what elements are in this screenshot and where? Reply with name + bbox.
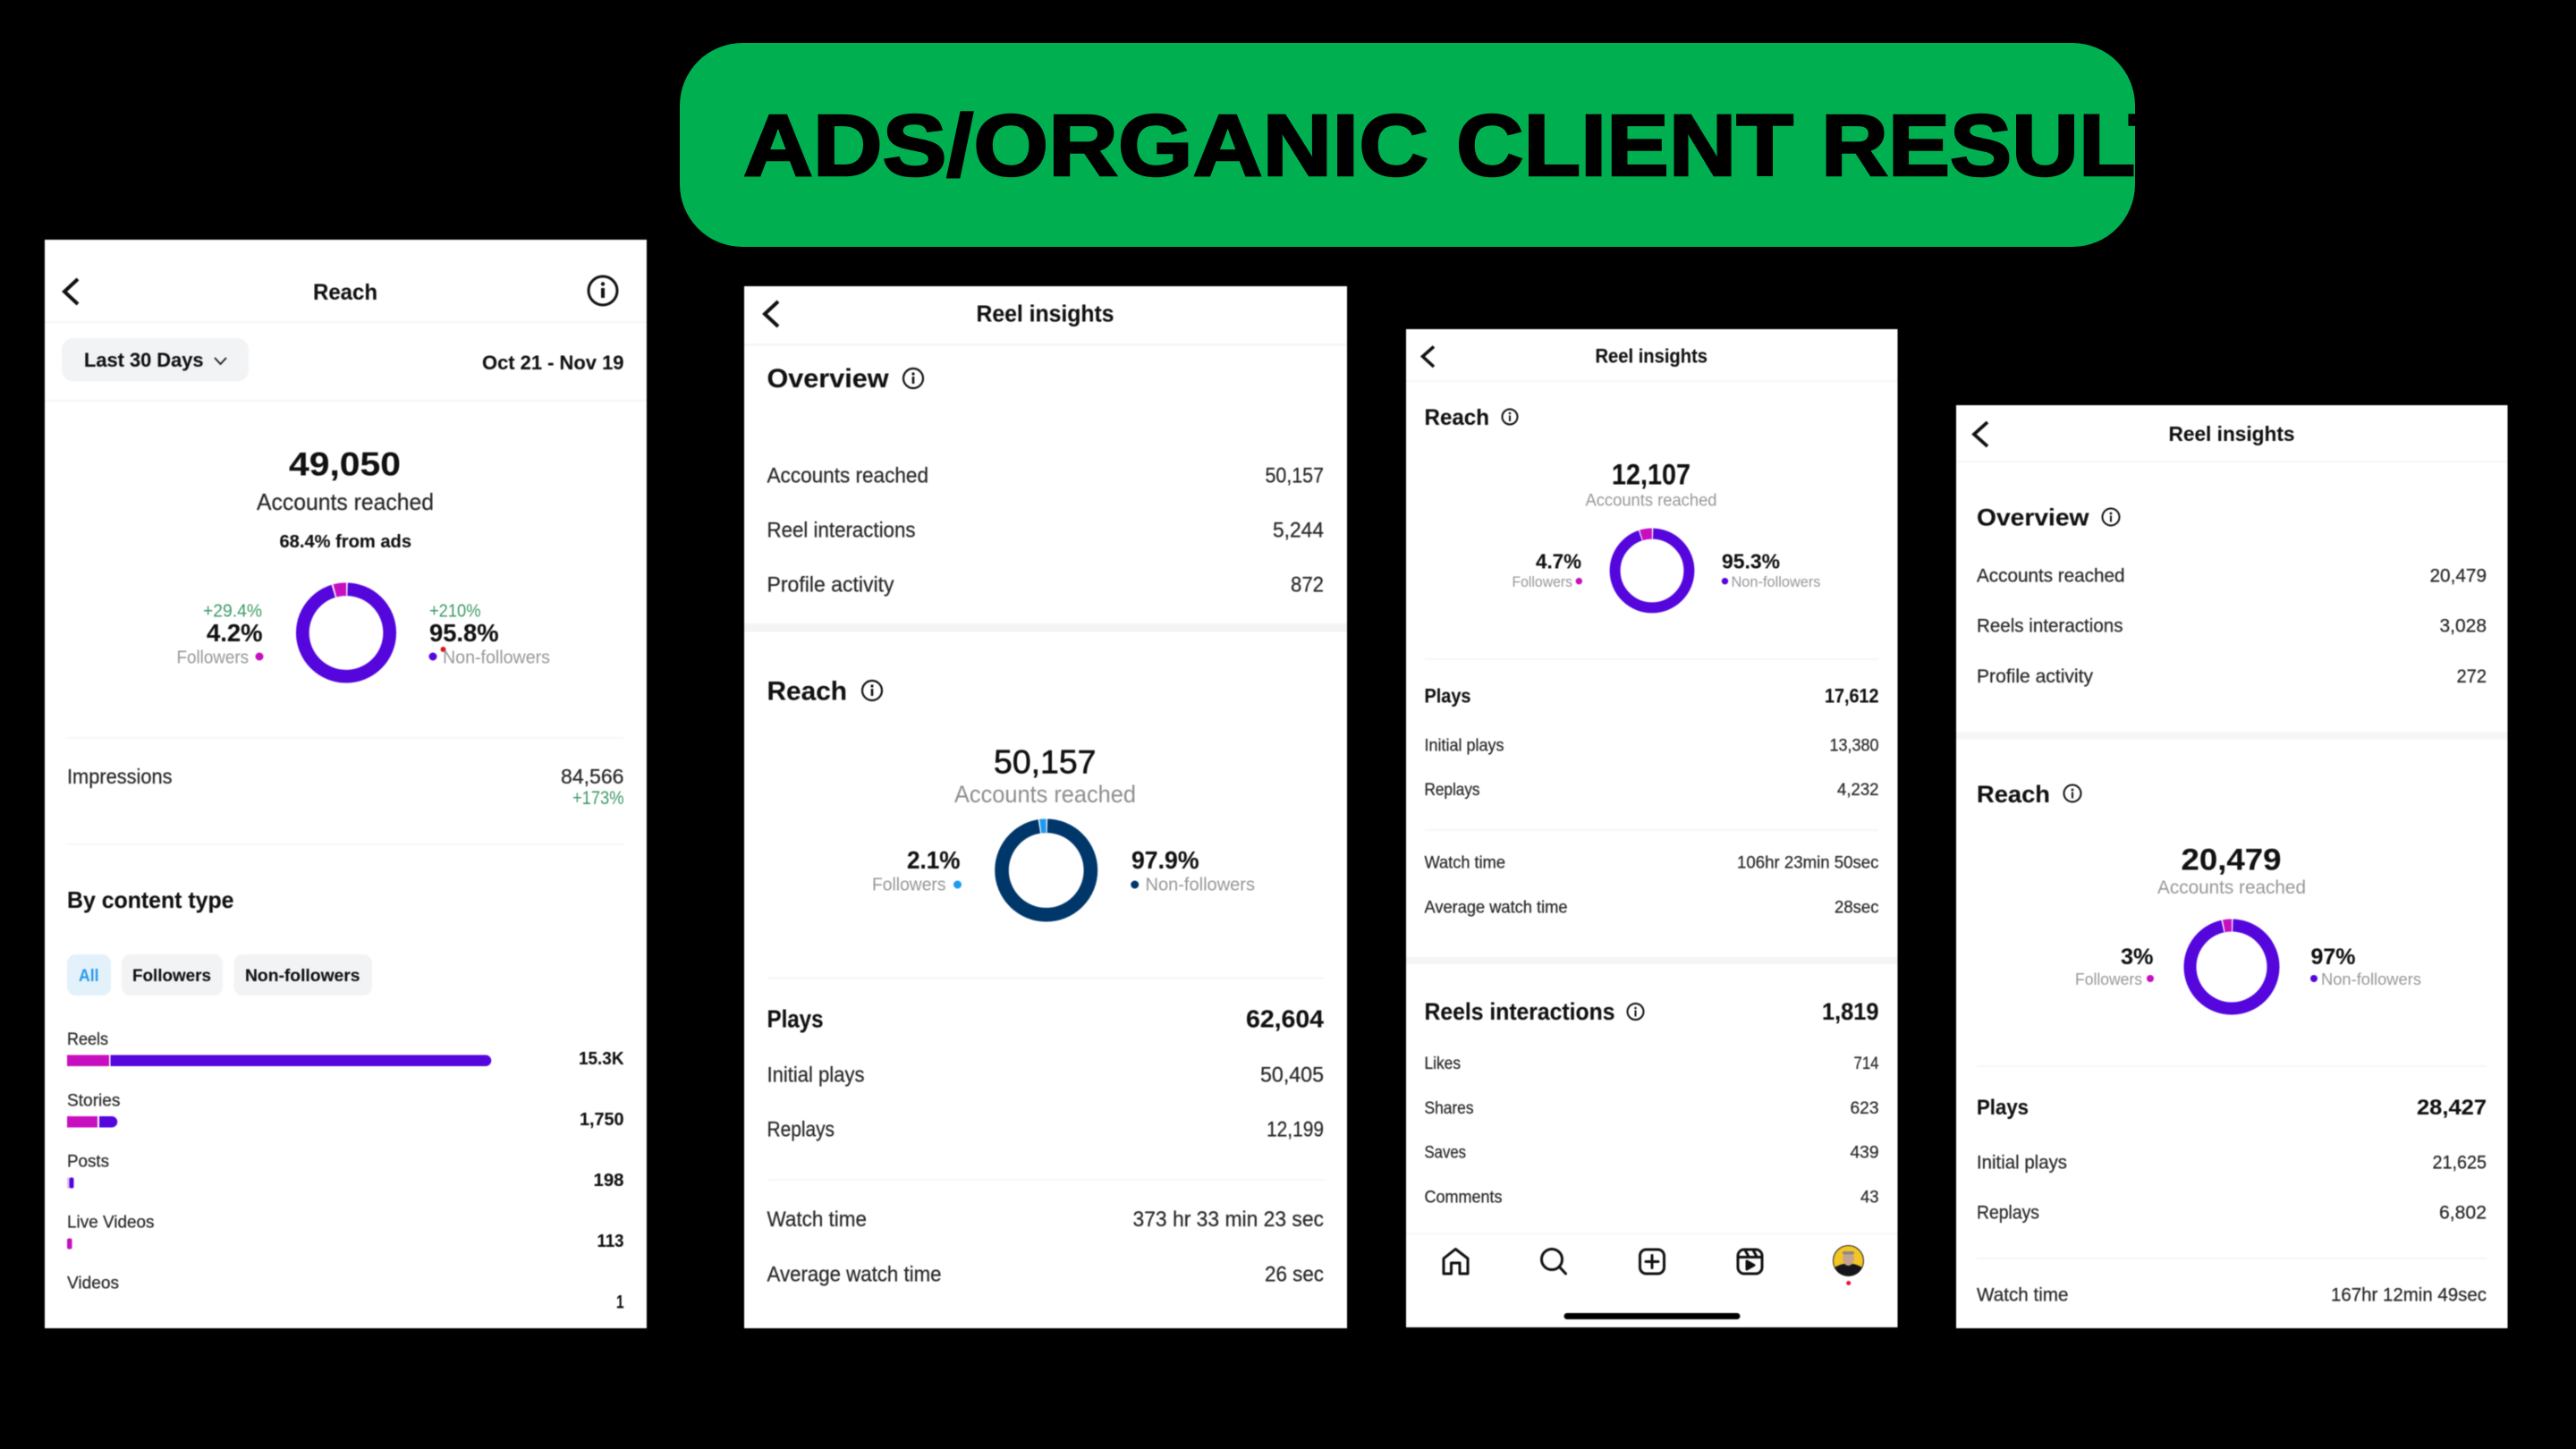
plays section: 50,405 bbox=[1260, 1063, 1324, 1088]
followers stat: 4.7% bbox=[1536, 549, 1581, 572]
followers stat: Followers bbox=[177, 648, 249, 667]
heading: Reel insights bbox=[2168, 422, 2295, 445]
back arrow bbox=[64, 279, 78, 304]
watch time section bbox=[767, 1208, 1324, 1286]
panel: reel insights 1 bbox=[744, 286, 1347, 1328]
heading: by content type: By content type bbox=[67, 886, 234, 913]
heading: Reel insights bbox=[1596, 345, 1707, 367]
bar: stories bbox=[67, 1091, 624, 1130]
overview rows bbox=[767, 463, 1324, 597]
bar: posts bbox=[67, 1152, 624, 1191]
donut chart bbox=[996, 819, 1097, 921]
icon: create bbox=[1640, 1250, 1664, 1274]
icon: reels bbox=[1738, 1250, 1762, 1274]
watch time section: 26 sec bbox=[1265, 1263, 1324, 1286]
non-followers stat: 97.9% bbox=[1131, 846, 1199, 874]
heading: Reach bbox=[313, 280, 377, 305]
donut chart bbox=[2182, 918, 2281, 1016]
overview rows: 20,479 bbox=[2429, 565, 2487, 587]
reels interactions section: Reels interactions bbox=[1424, 998, 1615, 1025]
non-followers stat bbox=[429, 601, 550, 667]
back arrow bbox=[1974, 422, 1987, 446]
non-followers stat: Non-followers bbox=[1732, 573, 1821, 590]
watch time section: Average watch time bbox=[767, 1263, 941, 1286]
heading: Reel insights bbox=[977, 302, 1114, 327]
accounts reached total: Accounts reached bbox=[2157, 877, 2306, 898]
followers stat bbox=[2075, 945, 2154, 988]
plays section: Plays bbox=[767, 1005, 823, 1032]
reels interactions section bbox=[1424, 998, 1879, 1208]
bar: reels: 15.3K bbox=[579, 1049, 624, 1069]
plays section: Plays bbox=[1424, 685, 1470, 707]
notification dot bbox=[1846, 1281, 1851, 1285]
reels interactions section: Shares bbox=[1424, 1099, 1474, 1118]
overview rows: 272 bbox=[2456, 666, 2487, 687]
non-followers stat bbox=[2310, 945, 2421, 988]
impressions row: Impressions bbox=[67, 765, 172, 788]
impressions row: +173% bbox=[572, 788, 624, 809]
non-followers stat: Non-followers bbox=[443, 648, 550, 667]
bar: reels: Reels bbox=[67, 1030, 108, 1049]
accounts reached total: Accounts reached bbox=[954, 781, 1136, 808]
watch time section bbox=[1424, 853, 1878, 918]
bottom navigation bbox=[1444, 1249, 1762, 1274]
overview rows: Reel interactions bbox=[767, 519, 916, 542]
bar: posts: Posts bbox=[67, 1152, 109, 1172]
plays section: 4,232 bbox=[1837, 781, 1878, 800]
icon: search bbox=[1542, 1249, 1565, 1274]
reach heading: Reach bbox=[767, 676, 847, 707]
filter pills: Non-followers bbox=[245, 966, 360, 986]
bar: stories: 1,750 bbox=[580, 1110, 624, 1130]
accounts reached total bbox=[954, 744, 1136, 808]
non-followers stat bbox=[1722, 549, 1821, 590]
followers stat: 4.2% bbox=[207, 619, 263, 647]
followers stat: 3% bbox=[2121, 945, 2154, 970]
non-followers stat: Non-followers bbox=[2321, 970, 2421, 988]
watch time row bbox=[1977, 1284, 2487, 1306]
date range dropdown: Last 30 Days bbox=[84, 349, 204, 371]
bar: live videos: 113 bbox=[597, 1232, 624, 1251]
watch time section: 373 hr 33 min 23 sec bbox=[1132, 1208, 1324, 1232]
non-followers stat: 97% bbox=[2311, 945, 2356, 970]
reach heading bbox=[1977, 781, 2080, 808]
overview rows: 5,244 bbox=[1273, 519, 1324, 542]
plays section: 28,427 bbox=[2417, 1096, 2487, 1120]
date range dropdown bbox=[62, 338, 249, 381]
title: CLIENT bbox=[1456, 97, 1793, 194]
title: RESULT bbox=[1821, 97, 2185, 194]
bar: posts: 198 bbox=[594, 1171, 624, 1191]
non-followers stat bbox=[1131, 846, 1255, 894]
back arrow bbox=[1422, 347, 1434, 367]
plays section: 12,199 bbox=[1267, 1118, 1324, 1141]
plays section: Initial plays bbox=[767, 1063, 864, 1088]
overview rows: Accounts reached bbox=[767, 463, 928, 488]
overview rows: Accounts reached bbox=[1977, 565, 2125, 587]
accounts reached total: 50,157 bbox=[994, 744, 1097, 780]
reels interactions section: 43 bbox=[1860, 1188, 1878, 1208]
followers stat: +29.4% bbox=[203, 601, 262, 621]
watch time row: Watch time bbox=[1977, 1284, 2068, 1306]
followers stat bbox=[1512, 549, 1582, 590]
accounts reached total bbox=[257, 445, 434, 552]
watch time section: Watch time bbox=[1424, 853, 1505, 873]
plays section: 6,802 bbox=[2439, 1202, 2487, 1224]
donut chart bbox=[292, 579, 401, 687]
overview rows: Profile activity bbox=[767, 572, 894, 597]
non-followers stat: 95.3% bbox=[1722, 549, 1780, 572]
plays section: Replays bbox=[767, 1118, 835, 1141]
impressions row: 84,566 bbox=[561, 765, 624, 788]
plays section: 62,604 bbox=[1246, 1005, 1324, 1032]
accounts reached total bbox=[2157, 843, 2306, 898]
overview rows: Reels interactions bbox=[1977, 615, 2123, 637]
home indicator bbox=[1563, 1313, 1741, 1319]
plays section: Replays bbox=[1424, 781, 1479, 800]
reels interactions section: Saves bbox=[1424, 1143, 1466, 1163]
watch time section: 106hr 23min 50sec bbox=[1737, 853, 1878, 873]
bar: live videos: Live Videos bbox=[67, 1213, 155, 1233]
watch time row: 167hr 12min 49sec bbox=[2331, 1284, 2487, 1306]
impressions row bbox=[67, 765, 624, 809]
plays section bbox=[1424, 685, 1878, 800]
accounts reached total: 68.4% from ads bbox=[279, 532, 411, 552]
plays section bbox=[767, 1005, 1324, 1141]
accounts reached total: Accounts reached bbox=[257, 488, 434, 515]
plays section: 17,612 bbox=[1825, 685, 1878, 707]
non-followers stat: Non-followers bbox=[1145, 875, 1255, 894]
title banner bbox=[680, 43, 2185, 247]
filter pills: All bbox=[79, 966, 98, 986]
plays section: Initial plays bbox=[1977, 1152, 2067, 1174]
title bbox=[744, 111, 2135, 179]
reels interactions section: 439 bbox=[1850, 1143, 1878, 1163]
watch time section: Average watch time bbox=[1424, 898, 1567, 918]
followers stat: 2.1% bbox=[907, 846, 961, 874]
followers stat: Followers bbox=[2075, 970, 2142, 988]
reels interactions section: 714 bbox=[1853, 1055, 1879, 1073]
overview rows bbox=[1977, 565, 2487, 687]
panel: reach overview bbox=[45, 240, 647, 1328]
back arrow bbox=[765, 301, 778, 326]
plays section bbox=[1977, 1096, 2487, 1224]
watch time section: Watch time bbox=[767, 1208, 867, 1232]
reels interactions section: 1,819 bbox=[1822, 998, 1878, 1025]
reels interactions section: 623 bbox=[1850, 1099, 1878, 1118]
bar: live videos bbox=[67, 1213, 624, 1251]
overview rows: 3,028 bbox=[2440, 615, 2487, 637]
reach heading: Reach bbox=[1977, 781, 2050, 808]
plays section: 21,625 bbox=[2433, 1152, 2487, 1174]
bar: stories: Stories bbox=[67, 1091, 121, 1111]
accounts reached total bbox=[1585, 458, 1717, 510]
icon: home bbox=[1444, 1249, 1468, 1274]
bar: videos: Videos bbox=[67, 1274, 119, 1293]
followers stat: Followers bbox=[1512, 573, 1572, 590]
bar: videos: 1 bbox=[616, 1292, 624, 1313]
icon: info bbox=[589, 276, 617, 305]
filter pills: Followers bbox=[132, 966, 211, 986]
accounts reached total: 12,107 bbox=[1612, 458, 1690, 490]
followers stat bbox=[177, 601, 263, 667]
icon: profile avatar bbox=[1834, 1245, 1864, 1285]
date range: Oct 21 - Nov 19 bbox=[482, 352, 624, 374]
accounts reached total: 20,479 bbox=[2181, 843, 2281, 877]
reels interactions section: Likes bbox=[1424, 1055, 1461, 1073]
title: ADS/ORGANIC bbox=[743, 97, 1428, 194]
accounts reached total: 49,050 bbox=[289, 445, 401, 483]
non-followers stat: 95.8% bbox=[429, 619, 499, 647]
plays section: Plays bbox=[1977, 1096, 2029, 1120]
plays section: Replays bbox=[1977, 1202, 2039, 1224]
non-followers stat: +210% bbox=[429, 601, 481, 621]
donut chart bbox=[1606, 524, 1699, 617]
panel: reel insights 3 bbox=[1956, 405, 2508, 1328]
overview rows: 872 bbox=[1291, 572, 1324, 597]
overview rows: 50,157 bbox=[1265, 463, 1324, 488]
accounts reached total: Accounts reached bbox=[1585, 492, 1717, 510]
plays section: 13,380 bbox=[1830, 737, 1878, 755]
followers stat bbox=[872, 846, 962, 894]
bar chart: content type bbox=[67, 1030, 624, 1313]
overview heading: Overview bbox=[767, 364, 889, 394]
bar: reels bbox=[67, 1030, 624, 1069]
followers stat: Followers bbox=[872, 875, 946, 894]
overview heading: Overview bbox=[1977, 504, 2090, 531]
bar: videos bbox=[67, 1274, 624, 1313]
overview rows: Profile activity bbox=[1977, 666, 2093, 687]
reach heading: Reach bbox=[1424, 405, 1489, 430]
watch time section: 28sec bbox=[1835, 898, 1878, 918]
panel: reel insights 2 bbox=[1406, 329, 1898, 1327]
plays section: Initial plays bbox=[1424, 737, 1504, 755]
filter pills bbox=[67, 954, 372, 996]
reels interactions section: Comments bbox=[1424, 1188, 1503, 1208]
